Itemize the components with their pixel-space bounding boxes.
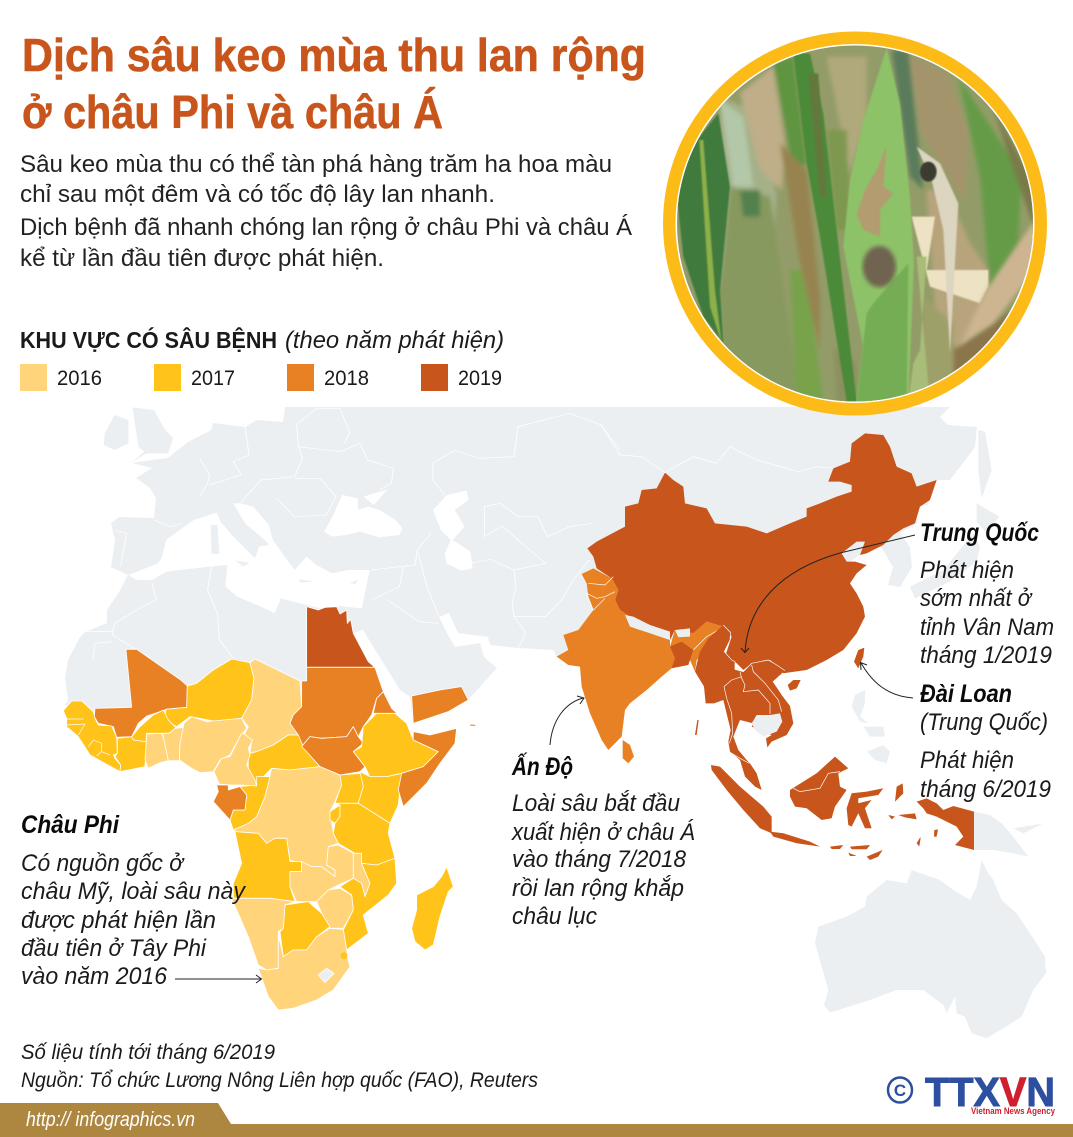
Niger 2017	[165, 659, 254, 727]
internal borders	[67, 719, 110, 756]
source note: Nguồn: Tổ chức Lương Nông Liên hợp quốc (FAO), Reuters	[21, 1069, 538, 1092]
callout: India: vào tháng 7/2018	[512, 846, 687, 873]
legend item 2018	[287, 364, 369, 391]
Borneo	[790, 757, 848, 820]
country borders, west	[87, 408, 620, 660]
Sumatra	[711, 765, 772, 833]
Gabon 2018	[213, 785, 247, 820]
West Africa countries	[63, 701, 257, 786]
callout: Africa: đầu tiên ở Tây Phi	[21, 935, 207, 962]
legend	[20, 326, 504, 391]
callout: Africa: châu Mỹ, loài sâu này	[21, 878, 247, 905]
callout: Taiwan: Phát hiện	[920, 747, 1014, 774]
callout: India	[511, 751, 695, 930]
callout: Africa: Châu Phi	[21, 811, 120, 839]
Southeast Asia mainland 2019	[695, 625, 864, 790]
map: world base and affected countries	[63, 407, 1046, 1038]
legend item 2016	[20, 364, 102, 391]
intro text	[20, 151, 632, 272]
footer bar	[0, 1103, 1073, 1137]
callout: Africa: vào năm 2016	[21, 963, 168, 990]
callout: Taiwan: (Trung Quốc)	[920, 709, 1048, 736]
legend item 2016: 2016	[57, 367, 102, 390]
Black Sea	[324, 495, 403, 537]
grey land: Sakhalin, Japan, Korea region	[910, 430, 999, 598]
Bhutan	[675, 628, 690, 637]
arrow: to Taiwan	[860, 662, 913, 698]
arrow: to India	[550, 696, 584, 745]
Nepal	[625, 615, 670, 640]
Zambia 2016	[290, 845, 353, 902]
source note	[21, 1041, 538, 1092]
Chad 2016	[242, 659, 302, 753]
Cameroon 2016	[214, 733, 257, 786]
Senegal to Liberia block 2017	[63, 701, 121, 772]
arrow: to West Africa text	[175, 975, 262, 983]
Djibouti	[403, 728, 413, 734]
Papua and Moluccas 2019	[888, 783, 974, 850]
callout: India: châu lục	[512, 903, 597, 930]
logo: TTXVN: Vietnam News Agency	[971, 1106, 1055, 1116]
title	[22, 29, 646, 138]
grey land: Eurasia and north Africa	[65, 407, 977, 734]
Eswatini	[341, 952, 347, 959]
source note: Số liệu tính tới tháng 6/2019	[21, 1041, 275, 1064]
Eritrea 2018	[373, 692, 408, 723]
callout: India: Loài sâu bắt đầu	[512, 790, 680, 817]
callout: Africa: được phát hiện lần	[21, 907, 216, 934]
intro text: chỉ sau một đêm và có tốc độ lây lan nhanh.	[20, 181, 495, 208]
Zimbabwe 2016	[317, 888, 353, 928]
legend heading	[20, 326, 504, 354]
Java	[770, 832, 820, 847]
callout: China	[920, 519, 1054, 669]
legend item 2019	[421, 364, 502, 391]
legend item 2018: 2018	[324, 367, 369, 390]
Mediterranean islands	[211, 525, 358, 584]
callout: Africa: Có nguồn gốc ở	[21, 850, 185, 877]
legend item 2019: 2019	[458, 367, 502, 390]
title: ở châu Phi và châu Á	[22, 86, 443, 138]
Indonesia and Malaysia 2019	[695, 720, 921, 860]
Madagascar 2017	[412, 867, 453, 950]
Bangladesh 2019	[670, 642, 693, 668]
Rwanda and Burundi	[330, 805, 340, 823]
logo: TTXVN: TTXVN	[925, 1069, 1055, 1115]
Egypt 2019	[307, 607, 375, 667]
title: Dịch sâu keo mùa thu lan rộng	[22, 29, 646, 81]
callout: India: rồi lan rộng khắp	[512, 875, 684, 902]
Sulawesi	[847, 788, 883, 828]
Nigeria 2016	[179, 717, 247, 773]
Democratic Republic of Congo 2016	[233, 767, 342, 877]
small islands	[695, 720, 699, 735]
callout: China: Phát hiện	[920, 557, 1014, 584]
intro text: Sâu keo mùa thu có thể tàn phá hàng trăm ha hoa màu	[20, 151, 612, 178]
Lesser Sunda islands	[830, 845, 843, 849]
Sudan 2018	[290, 667, 383, 747]
Burkina Faso 2017	[132, 710, 177, 742]
Angola 2017	[233, 832, 302, 902]
legend heading: KHU VỰC CÓ SÂU BỆNH	[20, 326, 277, 353]
Tanzania 2017	[333, 803, 395, 865]
photo: infested corn plant in yellow ring	[663, 32, 1047, 416]
Republic of Congo 2017	[230, 777, 270, 830]
legend item 2017	[154, 364, 235, 391]
Africa: main countries by detection year	[94, 607, 477, 1010]
callout: Taiwan: tháng 6/2019	[920, 776, 1051, 803]
Caspian Sea	[433, 491, 473, 571]
Yemen 2018	[412, 687, 468, 723]
Botswana 2017	[280, 902, 330, 957]
Ethiopia 2017	[353, 713, 438, 777]
Lesotho	[318, 968, 334, 983]
grey land: Philippines, Papua New Guinea, Australia	[815, 690, 1046, 1038]
India and Sri Lanka 2018	[557, 568, 723, 763]
intro text: Dịch bệnh đã nhanh chóng lan rộng ở châu Phi và châu Á	[20, 214, 632, 241]
Cambodia	[752, 713, 782, 737]
callout: China: tỉnh Vân Nam	[920, 614, 1054, 641]
callout: Africa	[21, 811, 247, 990]
Taiwan	[854, 648, 864, 668]
footer bar: http:// infographics.vn	[26, 1109, 195, 1131]
legend item 2017: 2017	[191, 367, 235, 390]
callout: India: Ấn Độ	[511, 751, 573, 781]
Sea of Azov	[364, 489, 387, 505]
Namibia 2016	[232, 898, 295, 970]
Kenya 2017	[358, 772, 402, 823]
intro text: kể từ lần đầu tiên được phát hiện.	[20, 245, 384, 272]
South Sudan 2018	[302, 727, 365, 775]
Central African Republic 2017	[248, 735, 320, 785]
Malawi 2016	[353, 853, 370, 897]
callout: China: tháng 1/2019	[920, 642, 1052, 669]
arrow: to Yunnan	[741, 535, 915, 652]
legend heading: (theo năm phát hiện)	[285, 327, 504, 354]
Australia	[815, 860, 1046, 1038]
Mediterranean Sea	[129, 503, 370, 613]
callout: India: xuất hiện ở châu Á	[511, 819, 695, 846]
Togo and Benin 2016	[163, 727, 184, 761]
Mali 2018	[94, 649, 187, 737]
Ghana 2016	[145, 733, 168, 768]
callout: China: sớm nhất ở	[920, 585, 1033, 612]
China 2019	[587, 433, 937, 673]
logo: TTXVN: C	[894, 1081, 906, 1100]
South Africa 2016	[258, 928, 350, 1010]
Ireland and Great Britain	[104, 407, 173, 463]
Ivory Coast 2017	[115, 737, 147, 772]
China borders with Russia and Mongolia	[600, 423, 833, 473]
callout: Taiwan: Đài Loan	[920, 680, 1012, 708]
callout: China: Trung Quốc	[920, 519, 1039, 547]
callout: Taiwan	[920, 680, 1051, 803]
Socotra	[470, 724, 477, 726]
Uganda 2017	[335, 773, 363, 803]
Hainan	[788, 680, 801, 691]
Somalia 2018	[398, 728, 457, 807]
Mozambique 2017	[340, 858, 397, 950]
